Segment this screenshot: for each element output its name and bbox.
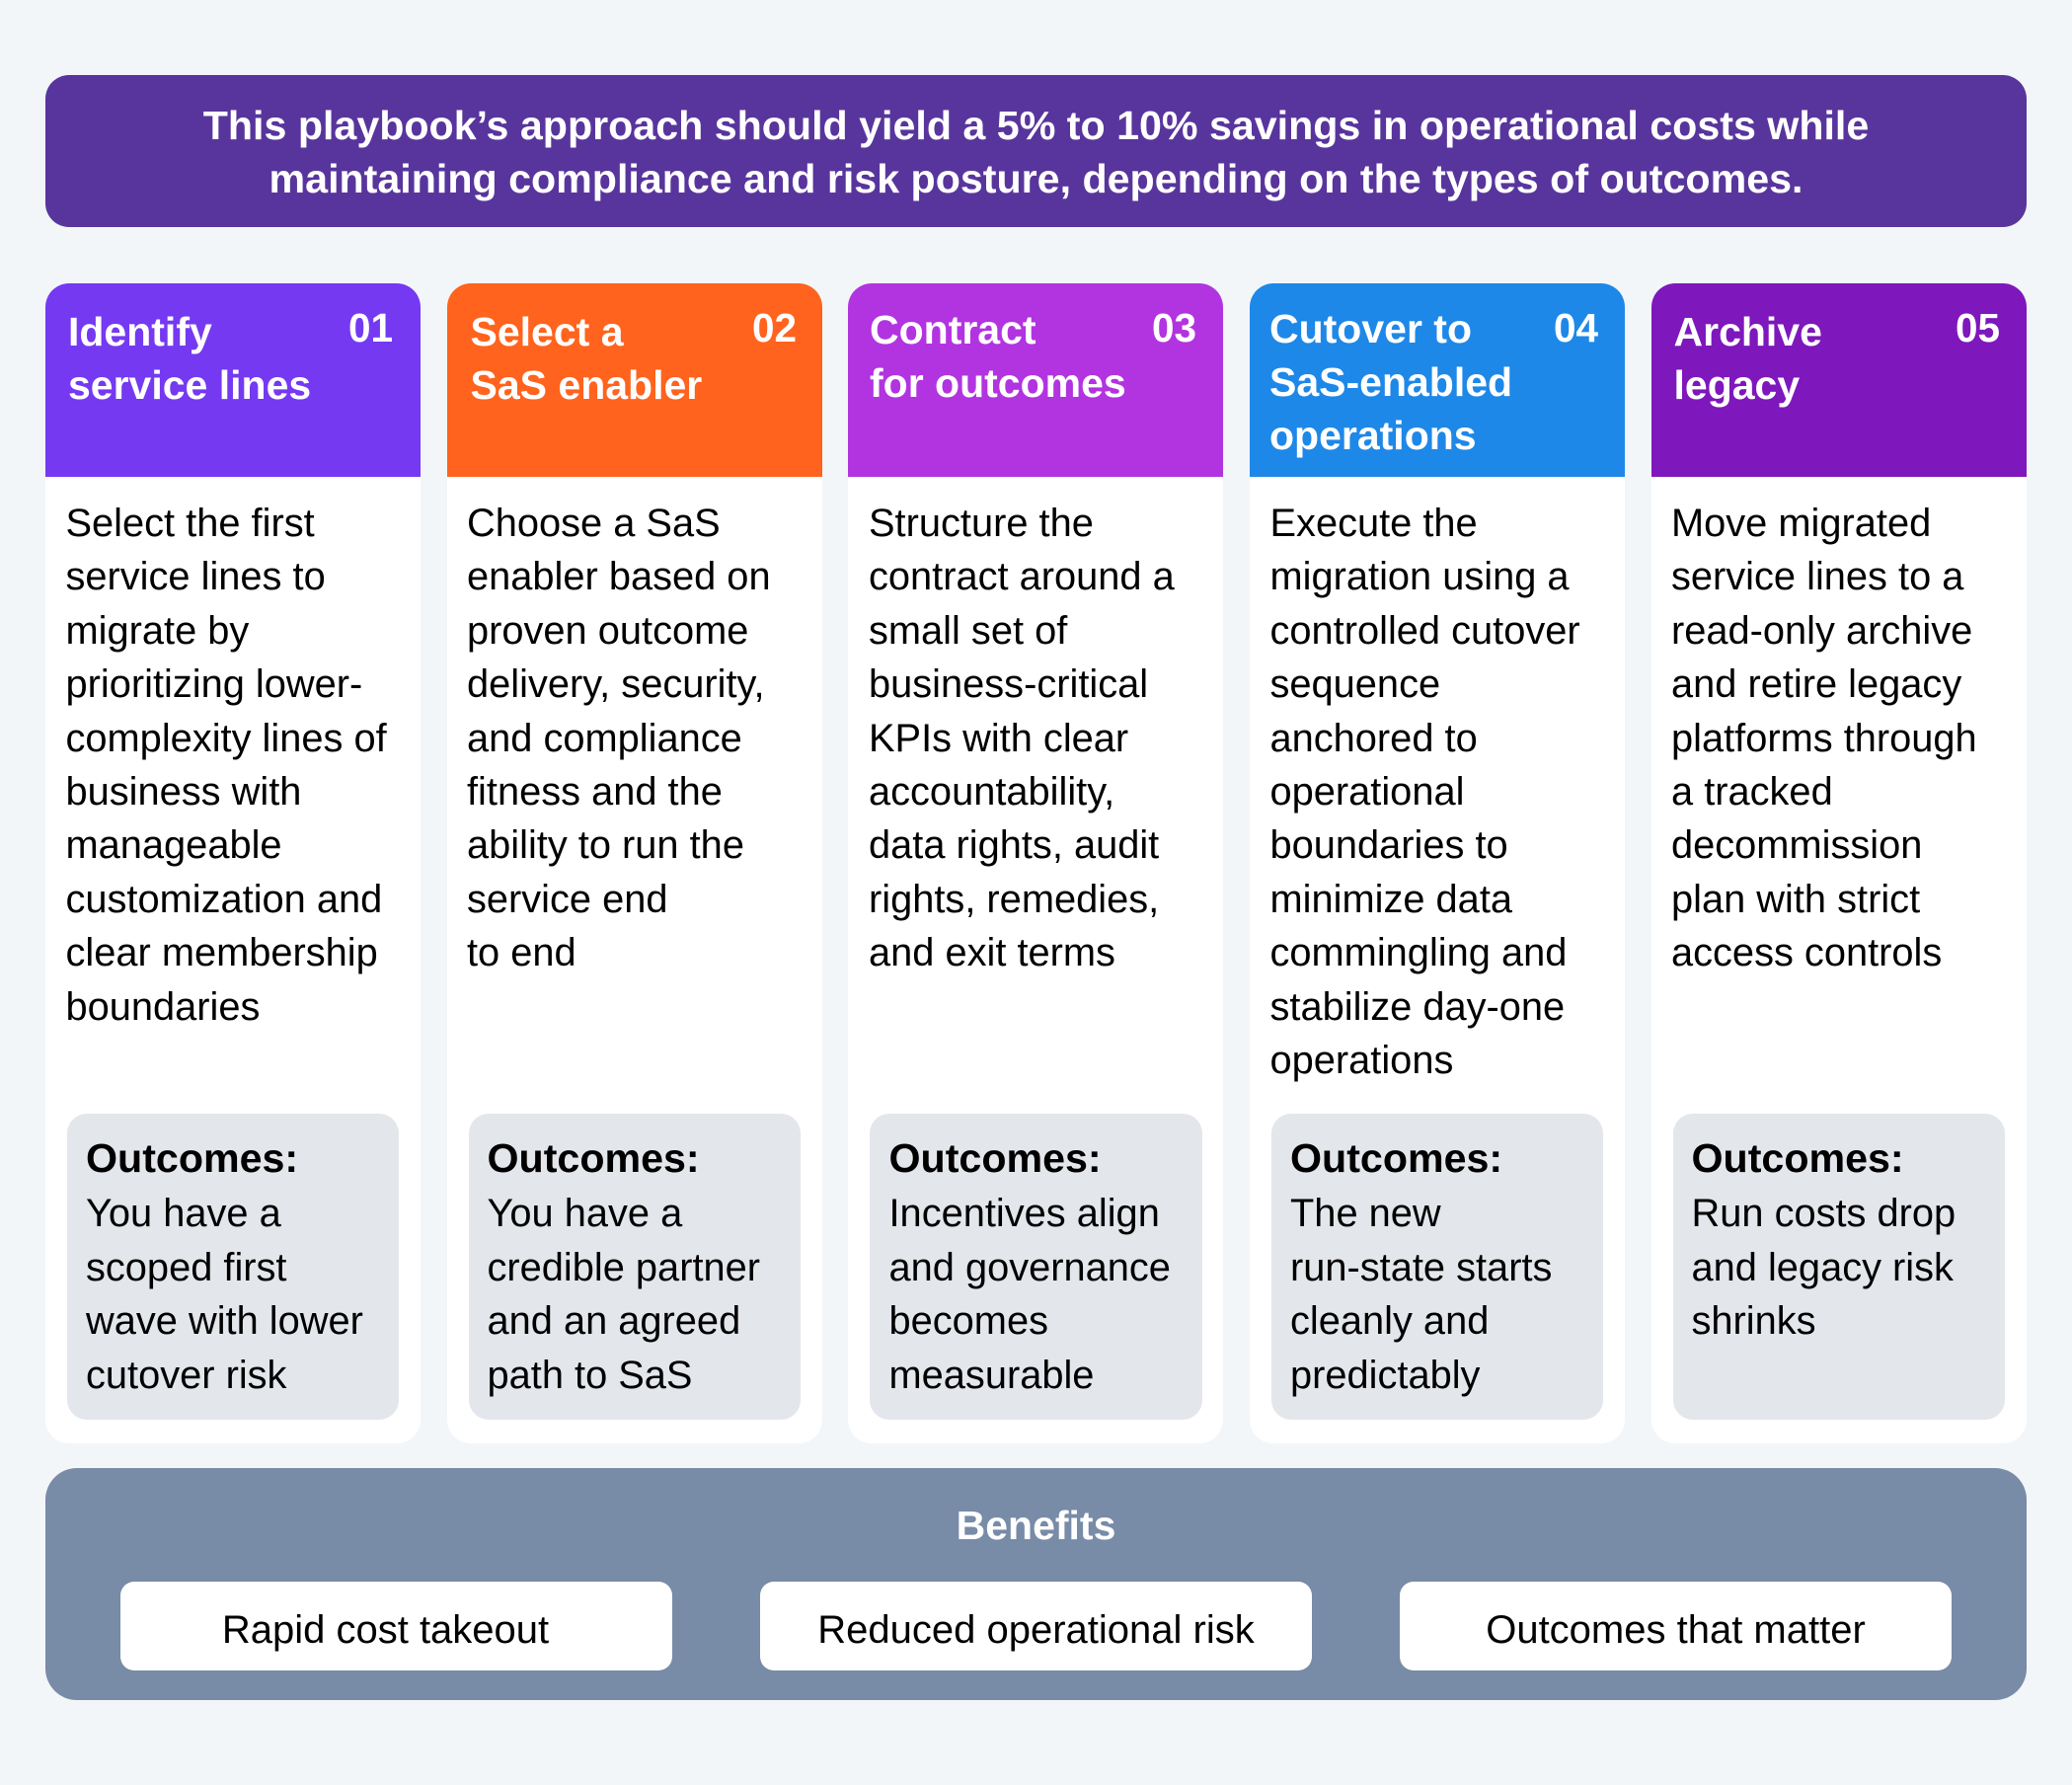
text: step 02 description: proven outcome bbox=[467, 609, 748, 653]
benefit: outcomes that matter bbox=[1400, 1582, 1952, 1670]
text: step 05 description bbox=[1671, 502, 1977, 974]
banner: savings headline bbox=[45, 75, 2027, 227]
heading: benefits: Benefits bbox=[957, 1503, 1115, 1548]
text: step 02 description: to end bbox=[467, 931, 576, 974]
text: step 03 description bbox=[869, 502, 1175, 974]
text: step 01 description: service lines to bbox=[65, 555, 326, 598]
text: step 04 description: commingling and bbox=[1269, 931, 1567, 974]
benefit: rapid cost takeout bbox=[120, 1582, 672, 1670]
outcomes box: step 01: wave with lower bbox=[86, 1299, 363, 1343]
text: step 01 description: prioritizing lower- bbox=[65, 662, 362, 706]
step number 05: 05 bbox=[1956, 305, 2000, 350]
text: step 05 description: platforms through bbox=[1671, 717, 1977, 760]
header: step 04 bbox=[1250, 283, 1625, 477]
text: step 04 description: minimize data bbox=[1269, 878, 1512, 921]
heading: identify service lines bbox=[68, 309, 311, 408]
text: step 04 description: boundaries to bbox=[1269, 823, 1508, 867]
heading: select a SaS enabler bbox=[470, 309, 702, 408]
text: step 01 description: complexity lines of bbox=[65, 717, 387, 760]
outcomes box: step 04: run-state starts bbox=[1290, 1246, 1552, 1289]
benefit: rapid cost takeout: Rapid cost takeout bbox=[222, 1608, 549, 1652]
text: step 01 description: boundaries bbox=[65, 985, 260, 1029]
text: step 04 description: sequence bbox=[1269, 662, 1440, 706]
text: step 04 description: Execute the bbox=[1269, 502, 1478, 545]
text: step 02 description: enabler based on bbox=[467, 555, 771, 598]
header: step 01 bbox=[45, 283, 421, 477]
heading: contract for outcomes: for outcomes bbox=[870, 360, 1126, 406]
outcomes box: step 03: Outcomes: bbox=[888, 1135, 1102, 1181]
outcomes box: step 03: Incentives align bbox=[888, 1192, 1160, 1235]
text: step 05 description: read-only archive bbox=[1671, 609, 1972, 653]
text: step 01 description: business with bbox=[65, 770, 301, 814]
text: step 05 description: plan with strict bbox=[1671, 878, 1920, 921]
outcomes box: step 03: becomes bbox=[888, 1299, 1048, 1343]
text: step 03 description: rights, remedies, bbox=[869, 878, 1159, 921]
text: step 04 description bbox=[1269, 502, 1580, 1082]
heading: cutover to SaS-enabled operations: SaS-enabled bbox=[1269, 359, 1512, 405]
text: step 03 description: accountability, bbox=[869, 770, 1114, 814]
text: step 02 description: fitness and the bbox=[467, 770, 723, 814]
step number 03: 03 bbox=[1152, 305, 1196, 350]
outcomes box: step 02 bbox=[469, 1114, 801, 1420]
heading: archive legacy bbox=[1674, 309, 1822, 408]
banner: savings headline: maintaining compliance and risk posture, depending on the types of outcomes. bbox=[269, 156, 1803, 201]
text: step 05 description: Move migrated bbox=[1671, 502, 1931, 545]
text: step 03 description: data rights, audit bbox=[869, 823, 1159, 867]
outcomes box: step 04 bbox=[1271, 1114, 1603, 1420]
step number 02: 02 bbox=[752, 305, 797, 350]
outcomes box: step 05: Run costs drop bbox=[1692, 1192, 1956, 1235]
panel: step 02 bbox=[447, 283, 822, 1443]
text: step 03 description: small set of bbox=[869, 609, 1067, 653]
text: step 02 description bbox=[467, 502, 771, 974]
banner: savings headline: This playbook’s approach should yield a 5% to 10% savings in operational costs while bbox=[203, 103, 1869, 148]
heading: cutover to SaS-enabled operations bbox=[1269, 306, 1512, 458]
text: step 05 description: service lines to a bbox=[1671, 555, 1963, 598]
text: step 01 description: clear membership bbox=[65, 931, 378, 974]
text: step 02 description: and compliance bbox=[467, 717, 742, 760]
heading: select a SaS enabler: Select a bbox=[470, 309, 624, 354]
outcomes box: step 03: and governance bbox=[888, 1246, 1171, 1289]
heading: select a SaS enabler: SaS enabler bbox=[470, 362, 702, 408]
outcomes box: step 01: scoped first bbox=[86, 1246, 286, 1289]
outcomes box: step 01: You have a bbox=[86, 1192, 281, 1235]
panel: step 04 bbox=[1250, 283, 1625, 1443]
text: step 05 description: access controls bbox=[1671, 931, 1942, 974]
text: step 03 description: and exit terms bbox=[869, 931, 1115, 974]
heading: identify service lines: Identify bbox=[68, 309, 212, 354]
text: step 01 description: manageable bbox=[65, 823, 282, 867]
outcomes box: step 01: Outcomes: bbox=[86, 1135, 298, 1181]
header: step 02 bbox=[447, 283, 822, 477]
outcomes box: step 05: and legacy risk bbox=[1692, 1246, 1954, 1289]
heading: cutover to SaS-enabled operations: Cutover to bbox=[1269, 306, 1472, 351]
text: step 01 description: migrate by bbox=[65, 609, 249, 653]
text: step 03 description: KPIs with clear bbox=[869, 717, 1128, 760]
benefit: reduced operational risk: Reduced operational risk bbox=[817, 1608, 1255, 1652]
text: step 01 description: customization and bbox=[65, 878, 382, 921]
text: step 02 description: ability to run the bbox=[467, 823, 744, 867]
outcomes box: step 05: Outcomes: bbox=[1692, 1135, 1904, 1181]
outcomes box: step 04: predictably bbox=[1290, 1354, 1480, 1397]
panel: benefits bbox=[45, 1468, 2027, 1700]
text: step 04 description: anchored to bbox=[1269, 717, 1478, 760]
outcomes box: step 05: shrinks bbox=[1692, 1299, 1816, 1343]
panel: step 01 bbox=[45, 283, 421, 1443]
text: step 04 description: operations bbox=[1269, 1039, 1453, 1082]
outcomes box: step 02: Outcomes: bbox=[488, 1135, 700, 1181]
heading: archive legacy: legacy bbox=[1674, 362, 1800, 408]
text: step 03 description: business-critical bbox=[869, 662, 1148, 706]
outcomes box: step 02: and an agreed bbox=[488, 1299, 740, 1343]
outcomes box: step 03: measurable bbox=[888, 1354, 1094, 1397]
text: step 05 description: decommission bbox=[1671, 823, 1922, 867]
outcomes box: step 01: cutover risk bbox=[86, 1354, 286, 1397]
heading: contract for outcomes bbox=[870, 306, 1126, 406]
panel: step 05 bbox=[1651, 283, 2027, 1443]
text: step 04 description: controlled cutover bbox=[1269, 609, 1580, 653]
text: step 02 description: delivery, security, bbox=[467, 662, 765, 706]
text: step 05 description: and retire legacy bbox=[1671, 662, 1961, 706]
outcomes box: step 04: cleanly and bbox=[1290, 1299, 1489, 1343]
header: step 05 bbox=[1651, 283, 2027, 477]
step number 01: 01 bbox=[348, 305, 393, 350]
text: step 01 description: Select the first bbox=[65, 502, 315, 545]
heading: contract for outcomes: Contract bbox=[870, 306, 1036, 351]
outcomes box: step 03 bbox=[870, 1114, 1202, 1420]
outcomes box: step 04: Outcomes: bbox=[1290, 1135, 1502, 1181]
text: step 05 description: a tracked bbox=[1671, 770, 1833, 814]
outcomes box: step 05 bbox=[1673, 1114, 2005, 1420]
text: step 03 description: contract around a bbox=[869, 555, 1175, 598]
step number 04: 04 bbox=[1554, 305, 1598, 350]
text: step 02 description: Choose a SaS bbox=[467, 502, 721, 545]
outcomes box: step 02: path to SaS bbox=[488, 1354, 692, 1397]
heading: cutover to SaS-enabled operations: operations bbox=[1269, 413, 1477, 458]
outcomes box: step 04: The new bbox=[1290, 1192, 1441, 1235]
benefit: outcomes that matter: Outcomes that matter bbox=[1486, 1608, 1866, 1652]
outcomes box: step 02: You have a bbox=[488, 1192, 682, 1235]
text: step 04 description: migration using a bbox=[1269, 555, 1570, 598]
text: step 01 description bbox=[65, 502, 387, 1029]
text: step 04 description: operational bbox=[1269, 770, 1464, 814]
heading: archive legacy: Archive bbox=[1674, 309, 1822, 354]
panel: step 03 bbox=[848, 283, 1223, 1443]
text: step 03 description: Structure the bbox=[869, 502, 1094, 545]
header: step 03 bbox=[848, 283, 1223, 477]
text: step 04 description: stabilize day-one bbox=[1269, 985, 1565, 1029]
heading: identify service lines: service lines bbox=[68, 362, 311, 408]
outcomes box: step 02: credible partner bbox=[488, 1246, 760, 1289]
outcomes box: step 01 bbox=[67, 1114, 399, 1420]
benefit: reduced operational risk bbox=[760, 1582, 1312, 1670]
text: step 02 description: service end bbox=[467, 878, 668, 921]
